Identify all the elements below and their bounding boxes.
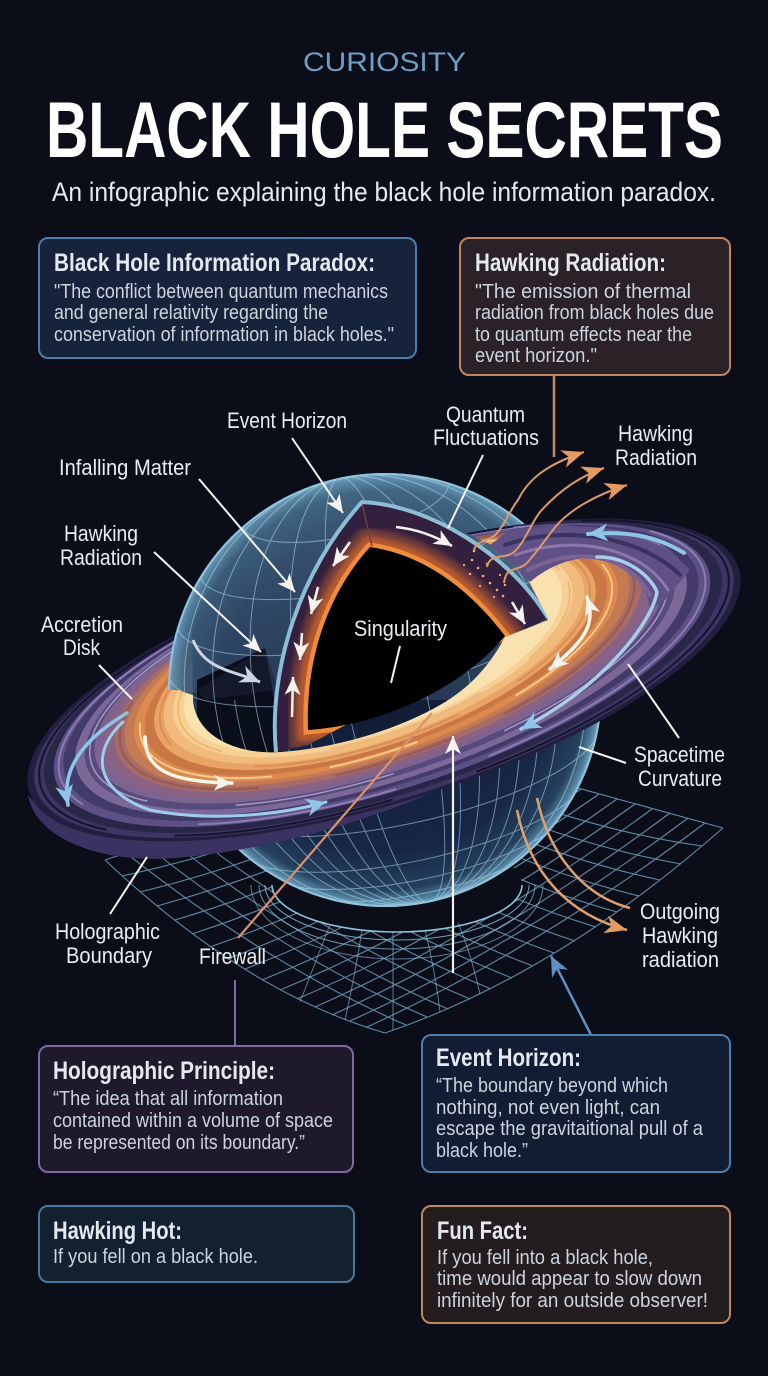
label: Hawking Radiation left: [60, 521, 142, 570]
label: Outgoing Hawking radiation: radiation: [642, 947, 719, 972]
panel: Black Hole Information Paradox: Black Hole Information Paradox:: [54, 249, 375, 277]
accretion disk: back: [0, 452, 768, 908]
panel: Hawking Hot: If you fell on a black hole.: [53, 1245, 258, 1268]
panel: Black Hole Information Paradox: "The conflict between quantum mechanics: [54, 280, 388, 303]
connector: Hawking Radiation panel: [553, 375, 555, 457]
label: Spacetime Curvature: [634, 742, 725, 791]
arrows: Hawking radiation escaping: [474, 452, 627, 583]
panel: Hawking Hot: [39, 1206, 354, 1282]
label: Hawking Radiation right: Hawking: [618, 421, 693, 446]
label: Hawking Radiation left: Hawking: [64, 521, 138, 546]
panel: Black Hole Information Paradox: and general relativity regarding the: [54, 301, 328, 324]
panel: Holographic Principle: be represented on its boundary.”: [53, 1131, 305, 1154]
panel: Event Horizon: escape the gravitaitional pull of a: [436, 1117, 704, 1140]
arrow: curved inflow on sphere: [193, 640, 260, 682]
label: Quantum Fluctuations: [433, 402, 539, 450]
overline: CURIOSITY: CURIOSITY: [303, 47, 466, 77]
label: Singularity: Singularity: [354, 616, 448, 641]
label: Outgoing Hawking radiation: [640, 899, 720, 972]
label: Holographic Boundary: Holographic: [55, 919, 160, 944]
label: Firewall: Firewall: [199, 944, 266, 969]
label: Accretion Disk: Accretion: [41, 612, 123, 637]
panel: Fun Fact: infinitely for an outside observer!: [437, 1289, 708, 1312]
label: Quantum Fluctuations: Fluctuations: [433, 425, 539, 450]
panel: Event Horizon: Event Horizon:: [436, 1044, 581, 1072]
label: Holographic Boundary: Boundary: [66, 943, 153, 968]
label: Hawking Radiation left: Radiation: [60, 545, 142, 570]
panel: Hawking Radiation: Hawking Radiation:: [475, 249, 666, 277]
panel: Hawking Radiation: event horizon.": [475, 344, 597, 367]
panel: Event Horizon: [422, 1035, 730, 1172]
arrows: outgoing Hawking radiation: [517, 798, 630, 930]
panel: Fun Fact: If you fell into a black hole,: [437, 1246, 653, 1269]
panel: Hawking Radiation: radiation from black holes due: [475, 301, 714, 324]
label: Holographic Boundary: [55, 919, 160, 968]
panel: Fun Fact: [422, 1206, 730, 1323]
subtitle: An infographic explaining the black hole information paradox.: [52, 177, 716, 207]
panel: Holographic Principle: [39, 1046, 353, 1172]
horizon rim: [275, 502, 548, 752]
panel: Event Horizon: black hole.”: [436, 1139, 528, 1162]
line: firewall: [238, 713, 432, 938]
accretion disk: front: [28, 518, 740, 842]
panel: Holographic Principle: contained within a volume of space: [53, 1109, 333, 1132]
panel: Event Horizon: nothing, not even light, can: [436, 1096, 660, 1119]
panel: Hawking Radiation: to quantum effects near the: [475, 323, 692, 346]
label: Accretion Disk: Disk: [63, 635, 101, 660]
label: Spacetime Curvature: Spacetime: [634, 742, 725, 767]
label: Hawking Radiation right: [615, 421, 697, 470]
quantum fluctuation sparks: [463, 550, 506, 598]
mantle flow arrows: [292, 527, 525, 717]
panel: Hawking Hot: Hawking Hot:: [53, 1217, 182, 1245]
disk flow arrows: [67, 533, 684, 816]
connector: Firewall to Holographic Principle: [234, 980, 236, 1046]
funnel lip: [251, 838, 543, 1030]
label: Outgoing Hawking radiation: Hawking: [642, 923, 718, 948]
panel: Fun Fact: time would appear to slow down: [437, 1267, 702, 1290]
panel: Event Horizon: “The boundary beyond which: [436, 1074, 668, 1097]
arrow: vertical into singularity: [452, 736, 454, 973]
panel: Hawking Radiation: [460, 238, 730, 375]
label: Outgoing Hawking radiation: Outgoing: [640, 899, 720, 924]
panel: Hawking Radiation: "The emission of thermal: [475, 280, 691, 303]
label: Quantum Fluctuations: Quantum: [446, 402, 525, 427]
spacetime grid sheet: [105, 750, 723, 1033]
cutaway wedge: [275, 502, 548, 752]
label: Spacetime Curvature: Curvature: [638, 766, 722, 791]
disk lower crescent: [28, 770, 480, 859]
panel: Black Hole Information Paradox: [39, 238, 416, 358]
panel: Holographic Principle: “The idea that all information: [53, 1087, 283, 1110]
arrow: Event Horizon panel to sheet: [551, 956, 591, 1035]
panel: Holographic Principle: Holographic Principle:: [53, 1057, 275, 1085]
disk upper-right purple band: [490, 525, 690, 610]
label: Event Horizon: Event Horizon: [227, 408, 347, 433]
panel: Black Hole Information Paradox: conservation of information in black holes.": [54, 323, 394, 346]
leader lines and arrows: [99, 438, 679, 914]
label: Hawking Radiation right: Radiation: [615, 445, 697, 470]
label: Accretion Disk: [41, 612, 123, 660]
panel: Fun Fact: Fun Fact:: [437, 1217, 528, 1245]
label: Infalling Matter: Infalling Matter: [59, 455, 191, 480]
sphere: event horizon surface: [168, 473, 600, 907]
singularity core: [308, 547, 505, 730]
